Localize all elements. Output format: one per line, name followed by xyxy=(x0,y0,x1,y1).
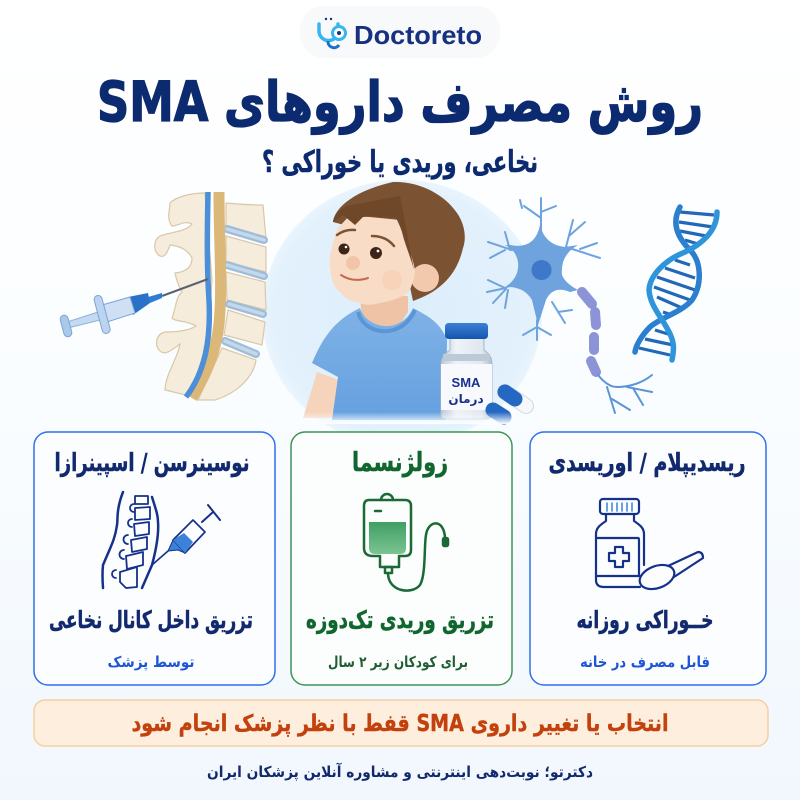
card: Nusinersen xyxy=(34,432,275,685)
arm xyxy=(303,372,339,418)
discs xyxy=(225,229,264,354)
vertebral bodies xyxy=(198,203,266,400)
card: Zolgensma xyxy=(291,432,512,685)
card description: تزریق وریدی تک‌دوزه xyxy=(306,606,494,634)
card description: تزریق داخل کانال نخاعی xyxy=(49,606,253,634)
illustration: DNA helix xyxy=(635,207,717,360)
blue canal xyxy=(186,192,209,397)
illustration: vial: درمان xyxy=(448,392,484,406)
illustration: capsules xyxy=(493,392,526,417)
card title: ریسدیپلام / اوریسدی xyxy=(548,448,746,478)
logo: Doctoreto xyxy=(300,6,500,58)
card title: نوسینرسن / اسپینرازا xyxy=(54,448,250,478)
card description: خــوراکی روزانه xyxy=(576,606,714,634)
illustration: spine with injection xyxy=(59,192,266,400)
axon terminal xyxy=(598,375,652,413)
spine posterior bones xyxy=(155,193,212,396)
subtitle: نخاعی، وریدی یا خوراکی ؟ xyxy=(262,145,538,180)
illustration: child xyxy=(303,182,465,420)
warning banner xyxy=(34,700,768,746)
shirt xyxy=(312,308,447,420)
icon: IV bag xyxy=(364,494,448,591)
fade at base of illustration xyxy=(150,412,550,424)
logo: Doctoreto: Doctoreto xyxy=(354,20,482,50)
myelin xyxy=(582,292,596,372)
syringe xyxy=(59,279,208,338)
card: Risdiplam xyxy=(530,432,766,685)
card note: برای کودکان زیر ۲ سال xyxy=(328,653,468,671)
card note: قابل مصرف در خانه xyxy=(580,653,710,671)
ear xyxy=(411,264,439,292)
mouth xyxy=(341,275,368,280)
illustration: vial: SMA xyxy=(452,375,481,390)
illustration: vial xyxy=(441,323,492,419)
warning banner: انتخاب یا تغییر داروی SMA قفط با نظر پزشک انجام شود xyxy=(132,711,668,737)
title: روش مصرف داروهای SMA xyxy=(97,70,703,135)
fringe xyxy=(333,196,414,270)
eyes xyxy=(338,244,350,254)
icon: syrup bottle and spoon xyxy=(596,499,703,593)
card title: زولژنسما xyxy=(352,448,448,478)
neck xyxy=(360,296,408,336)
background circle behind child xyxy=(262,180,542,446)
footer line: دکترتو؛ نوبت‌دهی اینترنتی و مشاوره آنلاین پزشکان ایران xyxy=(207,763,593,782)
collar xyxy=(358,310,415,331)
cheek xyxy=(382,270,402,290)
tan cord xyxy=(192,192,221,398)
icon: spine and syringe xyxy=(102,492,220,588)
card note: توسط پزشک xyxy=(108,653,194,672)
eyebrows xyxy=(337,230,394,246)
hair back xyxy=(333,182,465,301)
face xyxy=(329,215,415,305)
illustration: neuron xyxy=(487,198,652,413)
nose xyxy=(346,256,360,270)
